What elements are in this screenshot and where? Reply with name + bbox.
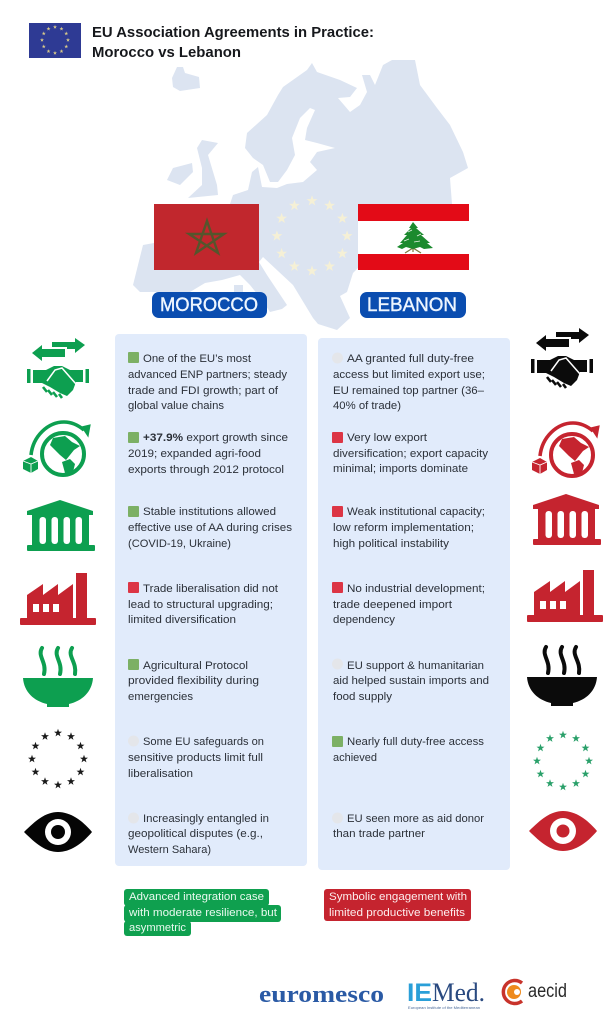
icon: factory left <box>20 573 96 625</box>
row: institutions: low reform implementation; <box>333 522 474 534</box>
row: geopolitics <box>128 812 269 856</box>
row: industry <box>332 582 485 626</box>
row: safeguards: liberalisation <box>128 768 193 780</box>
row: institutions: Weak institutional capacity; <box>347 506 485 518</box>
row: partnership: global value chains <box>128 400 224 412</box>
EU stars on the map <box>272 195 352 276</box>
row: perception: EU seen more as aid donor <box>347 813 484 825</box>
row: partnership: access but limited export use; <box>333 369 485 381</box>
row: safeguards <box>128 736 264 780</box>
row: institutions: high political instability <box>333 538 450 550</box>
row: partnership: EU remained top partner (36– <box>333 385 485 397</box>
icon: globe green <box>23 422 90 475</box>
callout: Lebanon verdict: limited productive benefits <box>329 907 466 919</box>
icon: bowl green <box>23 648 93 707</box>
logo: IEMed: IE <box>407 979 432 1007</box>
icon: globe red <box>532 423 599 476</box>
row: agriculture <box>332 658 489 703</box>
row: agriculture: EU support & humanitarian <box>347 660 484 672</box>
label: Morocco: MOROCCO <box>160 295 258 316</box>
row: industry: dependency <box>333 614 396 626</box>
logo: IEMed: Med. <box>432 978 485 1007</box>
row: industry: limited diversification <box>128 614 236 626</box>
logo: AECID <box>503 980 567 1004</box>
row: institutions: effective use of AA during crises <box>128 522 293 534</box>
row: industry: No industrial development; <box>347 583 485 595</box>
row: partnership <box>332 352 485 412</box>
callout: Morocco verdict: with moderate resilience, but <box>128 907 277 919</box>
title: Morocco vs Lebanon <box>92 45 241 61</box>
icon: eye black <box>24 812 92 852</box>
row: market access: Nearly full duty-free access <box>347 736 485 748</box>
row: industry <box>128 582 278 626</box>
icon: EU stars green <box>533 731 593 790</box>
row: partnership: One of the EU’s most <box>143 353 251 365</box>
logo: AECID: aecid <box>528 981 567 1002</box>
icon: EU flag <box>29 23 81 58</box>
icon: institution green <box>27 500 95 551</box>
row: agriculture <box>128 659 259 703</box>
row: geopolitics: geopolitical disputes (e.g., <box>128 828 263 840</box>
row: industry: trade deepened import <box>333 599 452 611</box>
row: institutions: (COVID-19, Ukraine) <box>128 538 231 550</box>
row: perception: than trade partner <box>333 828 425 840</box>
icon: institution red <box>533 494 601 545</box>
row: exports: diversification; export capacity <box>333 448 489 460</box>
row: agriculture: provided flexibility during <box>128 675 259 687</box>
row: agriculture: Agricultural Protocol <box>143 660 248 672</box>
row: partnership <box>128 352 287 412</box>
row: industry: lead to structural upgrading; <box>128 599 273 611</box>
row: industry: Trade liberalisation did not <box>143 583 278 595</box>
row: exports <box>332 432 489 475</box>
row: perception <box>332 812 484 840</box>
title: EU Association Agreements in Practice: <box>92 25 374 41</box>
row: exports: Very low export <box>347 432 427 444</box>
logo: IEMed <box>407 978 485 1010</box>
row: institutions: Stable institutions allowed <box>143 506 276 518</box>
logo: EuroMeSCo: euromesco <box>259 982 384 1008</box>
panel: Morocco <box>115 334 307 866</box>
row: market access: achieved <box>333 752 377 764</box>
icon: bowl black <box>527 647 597 706</box>
flag: Morocco <box>154 204 259 270</box>
row: safeguards: Some EU safeguards on <box>143 736 264 748</box>
row: partnership: 40% of trade) <box>333 400 401 412</box>
row: institutions <box>128 506 293 550</box>
callout: Morocco verdict: Advanced integration case <box>129 891 264 903</box>
flag: Lebanon <box>358 204 469 270</box>
row: institutions <box>332 506 485 550</box>
callout: Lebanon verdict: Symbolic engagement with <box>329 891 467 903</box>
row: agriculture: aid helped sustain imports and <box>333 675 489 687</box>
background map of Europe <box>133 60 468 330</box>
row: geopolitics: Increasingly entangled in <box>143 813 269 825</box>
row: safeguards: sensitive products limit full <box>128 752 263 764</box>
icon: handshake black <box>531 328 593 388</box>
row: market access <box>332 736 485 764</box>
label: Lebanon <box>360 292 466 318</box>
callout: Morocco verdict: asymmetric <box>129 922 186 934</box>
row: partnership: advanced ENP partners; steady <box>128 369 287 381</box>
row: agriculture: food supply <box>333 691 393 703</box>
row: partnership: AA granted full duty-free <box>347 353 474 365</box>
row: exports <box>128 432 288 476</box>
icon: handshake green <box>27 338 89 398</box>
icon: eye red <box>529 811 597 851</box>
row: exports: minimal; imports dominate <box>333 463 468 475</box>
title <box>92 25 374 61</box>
panel: Lebanon <box>318 338 510 870</box>
row: geopolitics: Western Sahara) <box>128 844 211 856</box>
label: Lebanon: LEBANON <box>367 295 457 316</box>
icon: factory right <box>527 570 603 622</box>
row: exports: exports through 2012 protocol <box>128 464 284 476</box>
icon: EU stars black <box>28 729 88 788</box>
row: exports: +37.9% export growth since <box>143 432 288 444</box>
callout: Morocco verdict <box>124 889 281 936</box>
callout: Lebanon verdict <box>324 889 471 921</box>
logo: IEMed: European Institute of the Mediterranean <box>408 1005 480 1010</box>
row: agriculture: emergencies <box>128 691 194 703</box>
row: exports: 2019; expanded agri-food <box>128 448 261 460</box>
row: partnership: trade and FDI growth; part of <box>128 385 279 397</box>
